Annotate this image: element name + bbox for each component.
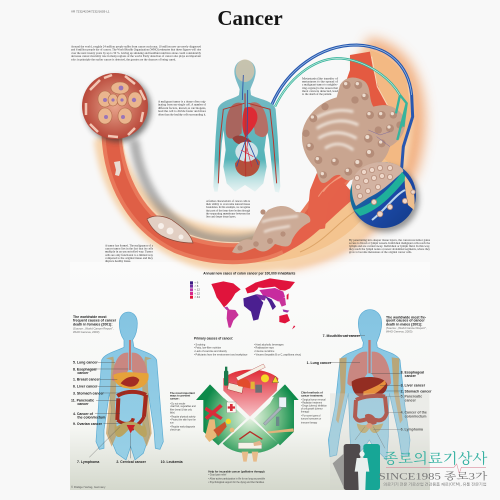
major vessels <box>218 93 277 183</box>
muscle layer <box>112 135 345 254</box>
primary causes section: • Smoking <box>194 343 206 346</box>
female labels: the colon/rectum <box>77 415 105 419</box>
cracks in tumor <box>368 130 390 147</box>
pale peach outer layer <box>94 50 413 273</box>
map title: Annual new cases of colon cancer per 100,000 inhabitants <box>203 271 296 275</box>
article number: VR 7232/4234/7232/1603-L1 <box>71 10 110 14</box>
intro text: role: in principle the earlier cancer is detected, the greater are the chances of being cured. <box>71 57 176 62</box>
primary causes section: • Pollutants from the environment and workplace <box>194 354 248 357</box>
prevention text: • Regular early-diagnosis <box>170 426 196 429</box>
bottom right watermark <box>330 393 488 490</box>
male heading: WHO Geneva, 2003) <box>386 330 412 334</box>
treatment text: tumors hormones or <box>301 418 321 421</box>
left arrow: prevention <box>196 384 246 445</box>
lymph spread text: access to blood or lymph vessels. Individual malignant cells reach the <box>349 241 431 245</box>
colon illustration: tissue layers <box>94 38 426 273</box>
prevention text: sun <box>170 423 174 425</box>
further characteristic text: their ability to overcome natural tissue <box>206 202 251 206</box>
female leader lines <box>89 362 130 458</box>
male labels: 6. Lymphoma <box>401 428 423 432</box>
map legend <box>190 281 200 299</box>
metastasis text: to the death of the patient. <box>302 92 332 96</box>
left lung <box>226 103 242 139</box>
heading: female: WHO Geneva, 2003) <box>73 330 99 334</box>
lymph spread text: lymph and are carried away. Individual or lymph fluid. In this way, <box>349 244 430 249</box>
metastasis text: Metastasis (the transfer of <box>302 76 338 80</box>
malignant tumor text: inating from one single cell. A number of <box>158 103 206 107</box>
intro text <box>71 44 202 62</box>
male labels: 8. Esophageal <box>401 371 424 375</box>
primary causes section: • Fatty, low-fibre nutrition <box>194 347 222 350</box>
female labels: 5. Lung cancer <box>73 361 98 365</box>
body silhouette <box>213 60 280 193</box>
treatment text: • For some types of <box>301 415 321 418</box>
lower colon under tumor <box>307 163 360 232</box>
prevention text: little) <box>170 411 175 414</box>
blood and lymph vessels <box>272 45 413 168</box>
tumor 1 <box>114 161 121 176</box>
metastasis text <box>302 76 339 96</box>
shadow inside the curve <box>134 140 296 240</box>
heart <box>242 107 257 137</box>
female labels: 6. Liver cancer <box>73 385 98 389</box>
map legend: < 6 <box>194 281 199 285</box>
treatment text: • Surgical tumor removal <box>301 399 326 402</box>
female figure with labels <box>71 312 183 464</box>
prevention text: • Protect the skin from the <box>170 419 197 422</box>
male labels: 4. Cancer of the <box>401 411 427 415</box>
prevention text: fibre (meat & fats only <box>170 408 193 411</box>
tumor formed text: cells are only functional to a limited way <box>105 253 153 257</box>
top wedge: causes <box>223 364 279 417</box>
primary causes section <box>194 336 301 357</box>
tumor mass <box>302 78 405 183</box>
further characteristic text: liver and deeper tissue layers. <box>206 214 236 218</box>
inset: cancer cells in lymph and blood vessels <box>350 162 419 232</box>
palliative text: • Psychological support for the dying and their families <box>208 481 265 484</box>
watermark slogan: SINCE1985 종로3가 <box>379 471 488 483</box>
female body <box>96 312 163 460</box>
head tissue <box>236 59 254 82</box>
male labels: cancer <box>405 374 417 378</box>
heading: female: (Source: „World Cancer Report", <box>73 326 114 330</box>
inner lining <box>122 135 285 243</box>
malignant tumor text: often than the healthy cells surrounding it. <box>158 112 206 116</box>
intro text: decrease cancer mortality rate in many regions of the world. Early detection of cancer also plays an important <box>71 54 201 58</box>
map legend: < 44 <box>194 295 200 299</box>
primary causes section: • Hard alcoholic beverages <box>254 343 284 346</box>
primary causes section: • Lack of exercise and obesity <box>194 350 228 353</box>
primary causes section: • Viruses (hepatitis B or C, papilloma virus) <box>254 354 301 357</box>
metastasis text: metastases to the spread of <box>302 80 338 84</box>
palliative text: Help for incurable cancer (palliative therapy): <box>208 469 265 473</box>
small tumors along the colon <box>114 161 310 253</box>
map legend: < 8 <box>194 284 199 288</box>
liver and intestines <box>232 135 252 144</box>
map legend: < 12 <box>194 288 200 292</box>
title: Cancer <box>217 6 283 30</box>
further characteristic text: boundaries. In this example, we recognise <box>206 205 251 210</box>
heading: female: The worldwide most <box>73 315 107 319</box>
treatment text: therapy) <box>301 410 309 413</box>
map section <box>190 271 296 329</box>
tumor formed text: compared to the original tissue and they <box>105 256 153 260</box>
primary causes section: Primary causes of cancer: <box>194 336 233 340</box>
prevention text: check-ups <box>170 430 181 432</box>
male body <box>328 310 410 460</box>
peach wall <box>357 50 412 170</box>
male labels: 7. Mouth/throat cancer <box>323 334 361 338</box>
female labels: 11. Pancreatic <box>71 399 94 403</box>
tumor formed text: cancer tumor lies in the fact that its cells <box>105 247 154 251</box>
palliative text <box>208 469 266 484</box>
primary causes section: • Intense sunshine <box>254 350 275 353</box>
female labels: 4. Cancer of <box>73 412 94 416</box>
prevention and treatment diagram <box>196 364 299 462</box>
treatment text: immune therapy <box>301 422 318 425</box>
further characteristic text: that parts of the tissue have broken through <box>206 208 250 212</box>
further characteristic text: A further characteristic of cancer cells is <box>206 199 251 203</box>
female labels: 10. Leukemia <box>161 460 183 464</box>
treatment text: cancer treatment: <box>301 394 323 398</box>
male heading: (Source: „World Cancer Report", <box>386 326 427 330</box>
intro text: Around the world, roughly 24 million people suffer from cancer each year. 10 million new are newly diagnosed <box>71 44 201 50</box>
world map <box>211 278 295 329</box>
red tissue <box>340 52 388 127</box>
metastasis text: ring organs) is the reason that <box>302 86 338 90</box>
prevention text: The most important <box>170 391 195 395</box>
right arrow: treatment <box>254 384 299 445</box>
male labels: 5. Pancreatic <box>401 395 422 399</box>
lower panel background <box>70 262 430 490</box>
tumor 2 <box>147 216 193 243</box>
tumor formed text <box>105 244 154 263</box>
prevention text: cancer: <box>170 396 180 400</box>
treatment text: of cell growth (chemo- <box>301 407 323 410</box>
male labels: cancer <box>405 398 417 402</box>
prevention text: • Regular physical activity <box>170 416 196 419</box>
central body figure <box>213 59 280 193</box>
female labels: cancer <box>77 402 89 406</box>
male labels <box>307 334 432 432</box>
right lung <box>250 102 268 137</box>
primary causes section: • Radioactive rays <box>254 347 275 350</box>
heading: female: death in females (2001): <box>73 322 113 326</box>
prevention text: ways to prevent <box>170 394 190 398</box>
female labels <box>71 361 183 464</box>
male heading: death in males (2001): <box>386 322 422 326</box>
malignant tumor text <box>158 100 207 116</box>
male heading <box>386 315 427 334</box>
treatment text: • Drugs (chemo) inhibition <box>301 405 328 408</box>
lymph spread text: grow to become metastases of the original cancer cells. <box>349 250 412 254</box>
treatment text <box>301 391 328 425</box>
intro text: and 6 million people die of cancer. The World Health Organization (WHO) estimates that these figures will rise <box>71 48 202 52</box>
tumor formed text: A tumor has formed. The malignancy of a <box>105 244 154 248</box>
map legend: < 22 <box>194 291 200 295</box>
watermark logo <box>333 444 380 490</box>
watermark rule <box>386 464 486 473</box>
further characteristic text: the separating membrane between the <box>206 211 251 215</box>
tumor formed text: multiply in an uncontrolled way. Tumor <box>105 250 153 254</box>
malignant tumor text: different factors, known as carcinogens, <box>158 106 206 111</box>
watermark name: 종로의료기상사 <box>383 449 487 469</box>
intro text: over the next twenty years by up to 50 %. Giving up smoking and healthier nutrition alone could considerably <box>71 51 201 55</box>
watermark subtitle: 의료기기 전문 기료산업 건강용품 재료(OEM), 유통 전문기업 <box>383 482 487 488</box>
tumor 3 <box>232 206 310 253</box>
malignant tumor text: A malignant tumor is a tissue often orig- <box>158 100 206 104</box>
copyright note: © Rüdiger Verlag, Germany <box>71 485 106 489</box>
malignant tumor text: lead the cell to divide faster and more <box>158 109 207 113</box>
further characteristic text <box>206 199 251 218</box>
watermark panel <box>330 393 429 490</box>
treatment text: Chief methods of <box>301 391 323 395</box>
lymph spread text: they reach the lymph nodes or newer abdominal segments, where they <box>349 247 430 252</box>
treatment text: • Radiation treatment <box>301 402 322 405</box>
peach band under the colon <box>195 100 405 262</box>
male heading: The worldwide most fre- <box>386 315 427 319</box>
female labels: 1. Breast cancer <box>73 378 101 382</box>
male heading: quent causes of cancer <box>386 319 425 323</box>
palliative text: • Good pain relief <box>208 474 227 477</box>
male labels: 2. Stomach cancer <box>401 389 432 393</box>
female labels: cancer <box>77 371 89 375</box>
female labels: 8. Esophageal <box>73 367 96 371</box>
cell circle: malignant tumor close-up <box>82 73 151 142</box>
female labels: 2. Cervical cancer <box>116 460 147 464</box>
lymph spread text <box>349 238 431 254</box>
prevention text <box>170 391 197 432</box>
metastasis text: a malignant tumor to neighbo- <box>302 83 338 87</box>
male labels: 3. Liver cancer <box>401 383 426 387</box>
female labels: 3. Stomach cancer <box>73 391 104 395</box>
male labels: 1. Lung cancer <box>307 361 332 365</box>
heading: female: frequent causes of cancer <box>73 319 117 323</box>
prevention text: • Do not smoke <box>170 402 186 405</box>
tumor formed text: displace healthy tissue. <box>105 259 131 263</box>
palliative text: • Allow active participation in life for as long as possible <box>208 477 266 480</box>
metastasis text: most cancers detected, lead <box>302 89 339 94</box>
female labels: 9. Ovarian cancer <box>73 422 103 426</box>
male leader lines <box>330 336 401 448</box>
male labels: colon/rectum <box>405 414 427 418</box>
heading: female <box>73 315 117 334</box>
bottom wedge: palliative care <box>223 418 278 462</box>
upper right tissue and metastasis tumor <box>302 50 412 232</box>
orange halo, right side <box>280 38 426 268</box>
prevention text: • Eat fruit, vegetables and <box>170 405 196 408</box>
lymph spread text: By penetrating into deeper tissue layers, the cancerous tumor gains <box>349 238 431 243</box>
male figure with labels <box>307 310 432 460</box>
female labels: 7. Lymphoma <box>77 460 99 464</box>
